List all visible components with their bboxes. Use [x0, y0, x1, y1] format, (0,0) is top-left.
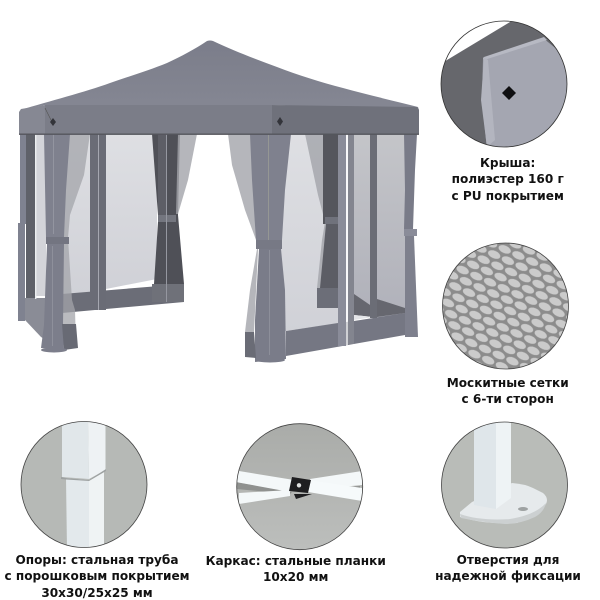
right front kick panel [286, 313, 405, 356]
right front curtain [228, 134, 291, 362]
left corner post and floor [18, 134, 46, 340]
tube close-up circle [20, 420, 150, 550]
net caption [447, 376, 569, 406]
net caption: с 6-ти сторон [462, 392, 554, 406]
tube caption [4, 553, 190, 600]
panel: mosquito net detail [442, 243, 569, 406]
net close-up circle [442, 243, 568, 369]
left front curtain [41, 134, 90, 352]
frame close-up circle [237, 424, 362, 550]
roof caption [452, 156, 564, 203]
panel: support tube detail [4, 420, 190, 600]
mesh window panels: right wall [275, 134, 405, 333]
right wall posts and floor [338, 134, 405, 346]
panel: roof detail [440, 20, 570, 203]
left wall centre post [90, 134, 106, 310]
base plate caption: Отверстия для [457, 553, 559, 567]
tube caption: 30x30/25x25 мм [41, 586, 153, 600]
left wall back curtain [152, 134, 197, 302]
right back curtain [305, 134, 338, 308]
tube caption: Опоры: стальная труба [15, 553, 179, 567]
gazebo illustration [18, 40, 419, 362]
left bottom kick panel [62, 284, 184, 313]
roof canopy [19, 40, 419, 135]
panel: base plate detail [435, 415, 581, 583]
roof caption: полиэстер 160 г [452, 172, 564, 186]
frame caption: 10x20 мм [263, 570, 328, 584]
mesh window panels: left wall [35, 134, 157, 296]
base plate caption [435, 553, 581, 583]
panel: frame detail [206, 420, 386, 584]
base plate caption: надежной фиксации [435, 569, 581, 583]
roof caption: Крыша: [480, 156, 535, 170]
frame caption [206, 554, 386, 584]
tube caption: с порошковым покрытием [4, 569, 190, 583]
circle outline [441, 21, 567, 147]
net caption: Москитные сетки [447, 376, 569, 390]
right corner curtain [404, 134, 418, 337]
base plate close-up circle [442, 422, 568, 548]
roof close-up circle [440, 20, 570, 150]
frame caption: Каркас: стальные планки [206, 554, 386, 568]
roof caption: с PU покрытием [452, 189, 564, 203]
